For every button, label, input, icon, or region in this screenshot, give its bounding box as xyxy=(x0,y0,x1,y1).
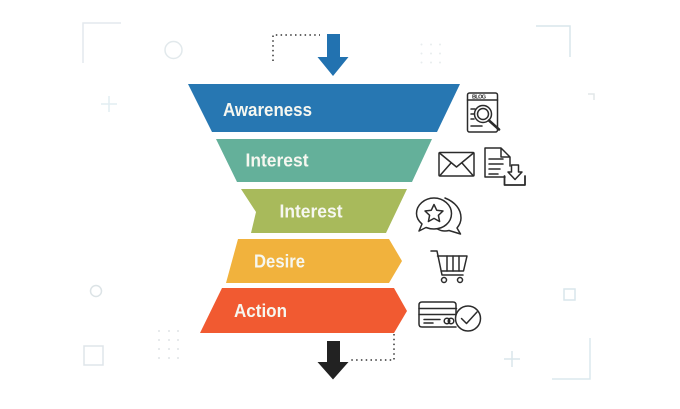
background decoration xyxy=(83,23,594,379)
icon: blog search: BLOG xyxy=(472,94,486,100)
bottom connector: dotted line and black arrow xyxy=(318,334,394,380)
funnel stage: Awareness: Awareness xyxy=(223,99,312,120)
icon: envelope xyxy=(439,152,474,176)
funnel stage: Desire xyxy=(226,239,402,283)
funnel stage: Interest (teal): Interest xyxy=(246,150,308,170)
decoration: right square xyxy=(564,289,575,300)
decoration: top circle xyxy=(165,42,182,58)
dotted line: bottom xyxy=(351,334,394,360)
decoration: top-left corner xyxy=(83,23,121,63)
icon: blog search xyxy=(468,93,499,132)
funnel stage: Interest (green): Interest xyxy=(280,200,342,222)
funnel stage: Action xyxy=(200,288,407,333)
arrow: blue down xyxy=(318,34,348,76)
arrow: black down xyxy=(318,341,348,380)
funnel stage: Interest (teal) xyxy=(216,139,432,182)
icon: review chat bubbles xyxy=(416,198,461,234)
decoration: bottom dot grid xyxy=(158,330,179,359)
funnel stage: Interest (green) xyxy=(241,189,407,233)
icon: document download xyxy=(485,148,525,185)
funnel stage: Desire: Desire xyxy=(254,250,305,272)
decoration: bottom-right corner xyxy=(552,338,590,379)
decoration: top-right corner xyxy=(536,26,570,57)
funnel stage: Action: Action xyxy=(234,300,287,321)
icon: credit card with check xyxy=(419,302,480,331)
decoration: bottom-left square xyxy=(84,346,103,365)
funnel stage: Awareness xyxy=(188,84,460,132)
decoration: top dot grid xyxy=(420,44,441,64)
decoration: bottom plus xyxy=(504,351,520,367)
top connector: dotted line and blue arrow xyxy=(273,34,348,76)
decoration: bottom-left circle xyxy=(90,286,102,296)
icon: shopping cart xyxy=(431,251,467,282)
dotted line: top xyxy=(273,35,320,61)
decoration: small right corner xyxy=(588,94,594,100)
decoration: left plus xyxy=(101,96,117,112)
